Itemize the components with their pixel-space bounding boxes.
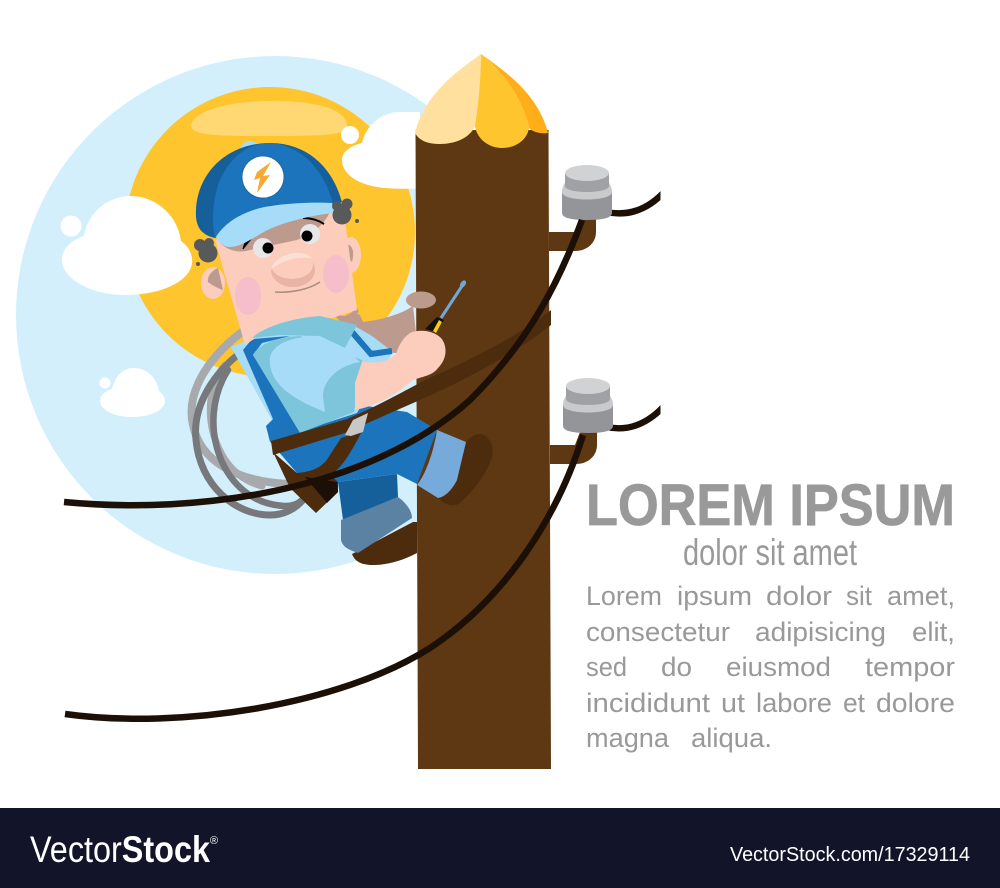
lower leg xyxy=(338,474,398,520)
belt buckle xyxy=(345,413,368,436)
left eyebrow xyxy=(243,231,259,249)
wire shadow on harness xyxy=(305,477,338,503)
lower crossarm xyxy=(550,432,597,464)
right eyebrow xyxy=(303,218,324,224)
collar xyxy=(252,316,357,348)
back arm and hand xyxy=(334,292,436,353)
harness xyxy=(273,431,362,513)
body text: labore xyxy=(756,688,832,718)
body text: ipsum xyxy=(677,581,752,611)
cloud left xyxy=(60,196,192,295)
body text: elit, xyxy=(912,617,955,647)
knee cuff xyxy=(417,430,466,498)
sun xyxy=(125,87,415,377)
hair left xyxy=(194,238,218,266)
subheading: dolor sit amet xyxy=(683,532,858,573)
overall straps xyxy=(243,336,300,442)
overall shoulder strap xyxy=(352,332,392,354)
upper crossarm xyxy=(549,219,596,251)
lower wire xyxy=(65,435,583,719)
forehead shadow xyxy=(220,210,330,252)
cloud top right xyxy=(341,112,420,189)
upper insulator xyxy=(562,165,612,220)
shirt xyxy=(231,317,393,433)
body text: sit xyxy=(846,581,872,611)
nose xyxy=(271,251,315,287)
right ear xyxy=(341,237,361,273)
right cheek xyxy=(323,255,349,293)
hair right xyxy=(332,198,359,224)
lightning bolt xyxy=(254,162,271,193)
body text: consectetur xyxy=(586,617,730,647)
cap xyxy=(196,141,342,247)
lower cuff xyxy=(341,497,412,553)
upper wire xyxy=(64,220,582,505)
front arm xyxy=(355,331,446,410)
body text: do xyxy=(661,652,692,682)
lower right wire xyxy=(607,404,666,428)
registered mark: ® xyxy=(210,835,218,847)
footer id: VectorStock.com/17329114 xyxy=(730,844,970,866)
left cheek xyxy=(235,277,261,315)
shirt chest xyxy=(270,336,360,412)
body text: adipisicing xyxy=(755,617,886,647)
body text: ut xyxy=(721,688,746,718)
body text: eiusmod xyxy=(726,652,831,682)
body text: sed xyxy=(586,652,627,682)
sky circle xyxy=(16,56,534,574)
body text xyxy=(586,581,955,753)
face xyxy=(201,205,361,345)
cap badge xyxy=(242,156,284,198)
left eye xyxy=(253,238,274,258)
climbing foot on pole xyxy=(438,434,493,505)
screwdriver xyxy=(425,279,467,333)
overalls xyxy=(266,405,437,484)
body text: et xyxy=(843,688,865,718)
lineman xyxy=(194,141,551,565)
left ear xyxy=(201,267,225,299)
body text: dolor xyxy=(766,581,832,611)
footer bar xyxy=(0,808,1000,888)
body text: amet, xyxy=(887,581,955,611)
body text: tempor xyxy=(865,652,955,682)
body text: Lorem xyxy=(586,581,662,611)
heading: LOREM IPSUM xyxy=(586,473,955,538)
belt xyxy=(271,310,551,455)
smile xyxy=(275,282,320,292)
lower boot xyxy=(352,522,417,565)
body text: magna xyxy=(586,723,670,753)
upper right wire xyxy=(606,190,666,213)
body text: aliqua. xyxy=(691,723,772,753)
cap brim xyxy=(216,203,334,247)
shirt shadow xyxy=(253,336,362,433)
head xyxy=(215,205,357,345)
right eye xyxy=(300,224,320,244)
body text: dolore xyxy=(876,688,955,718)
lower insulator xyxy=(563,378,613,433)
footer logo: VectorStock xyxy=(30,829,210,870)
body text: incididunt xyxy=(586,688,711,718)
pole xyxy=(415,54,551,769)
rope coil xyxy=(192,332,303,515)
cloud small xyxy=(100,368,165,417)
pole tip xyxy=(415,54,548,148)
